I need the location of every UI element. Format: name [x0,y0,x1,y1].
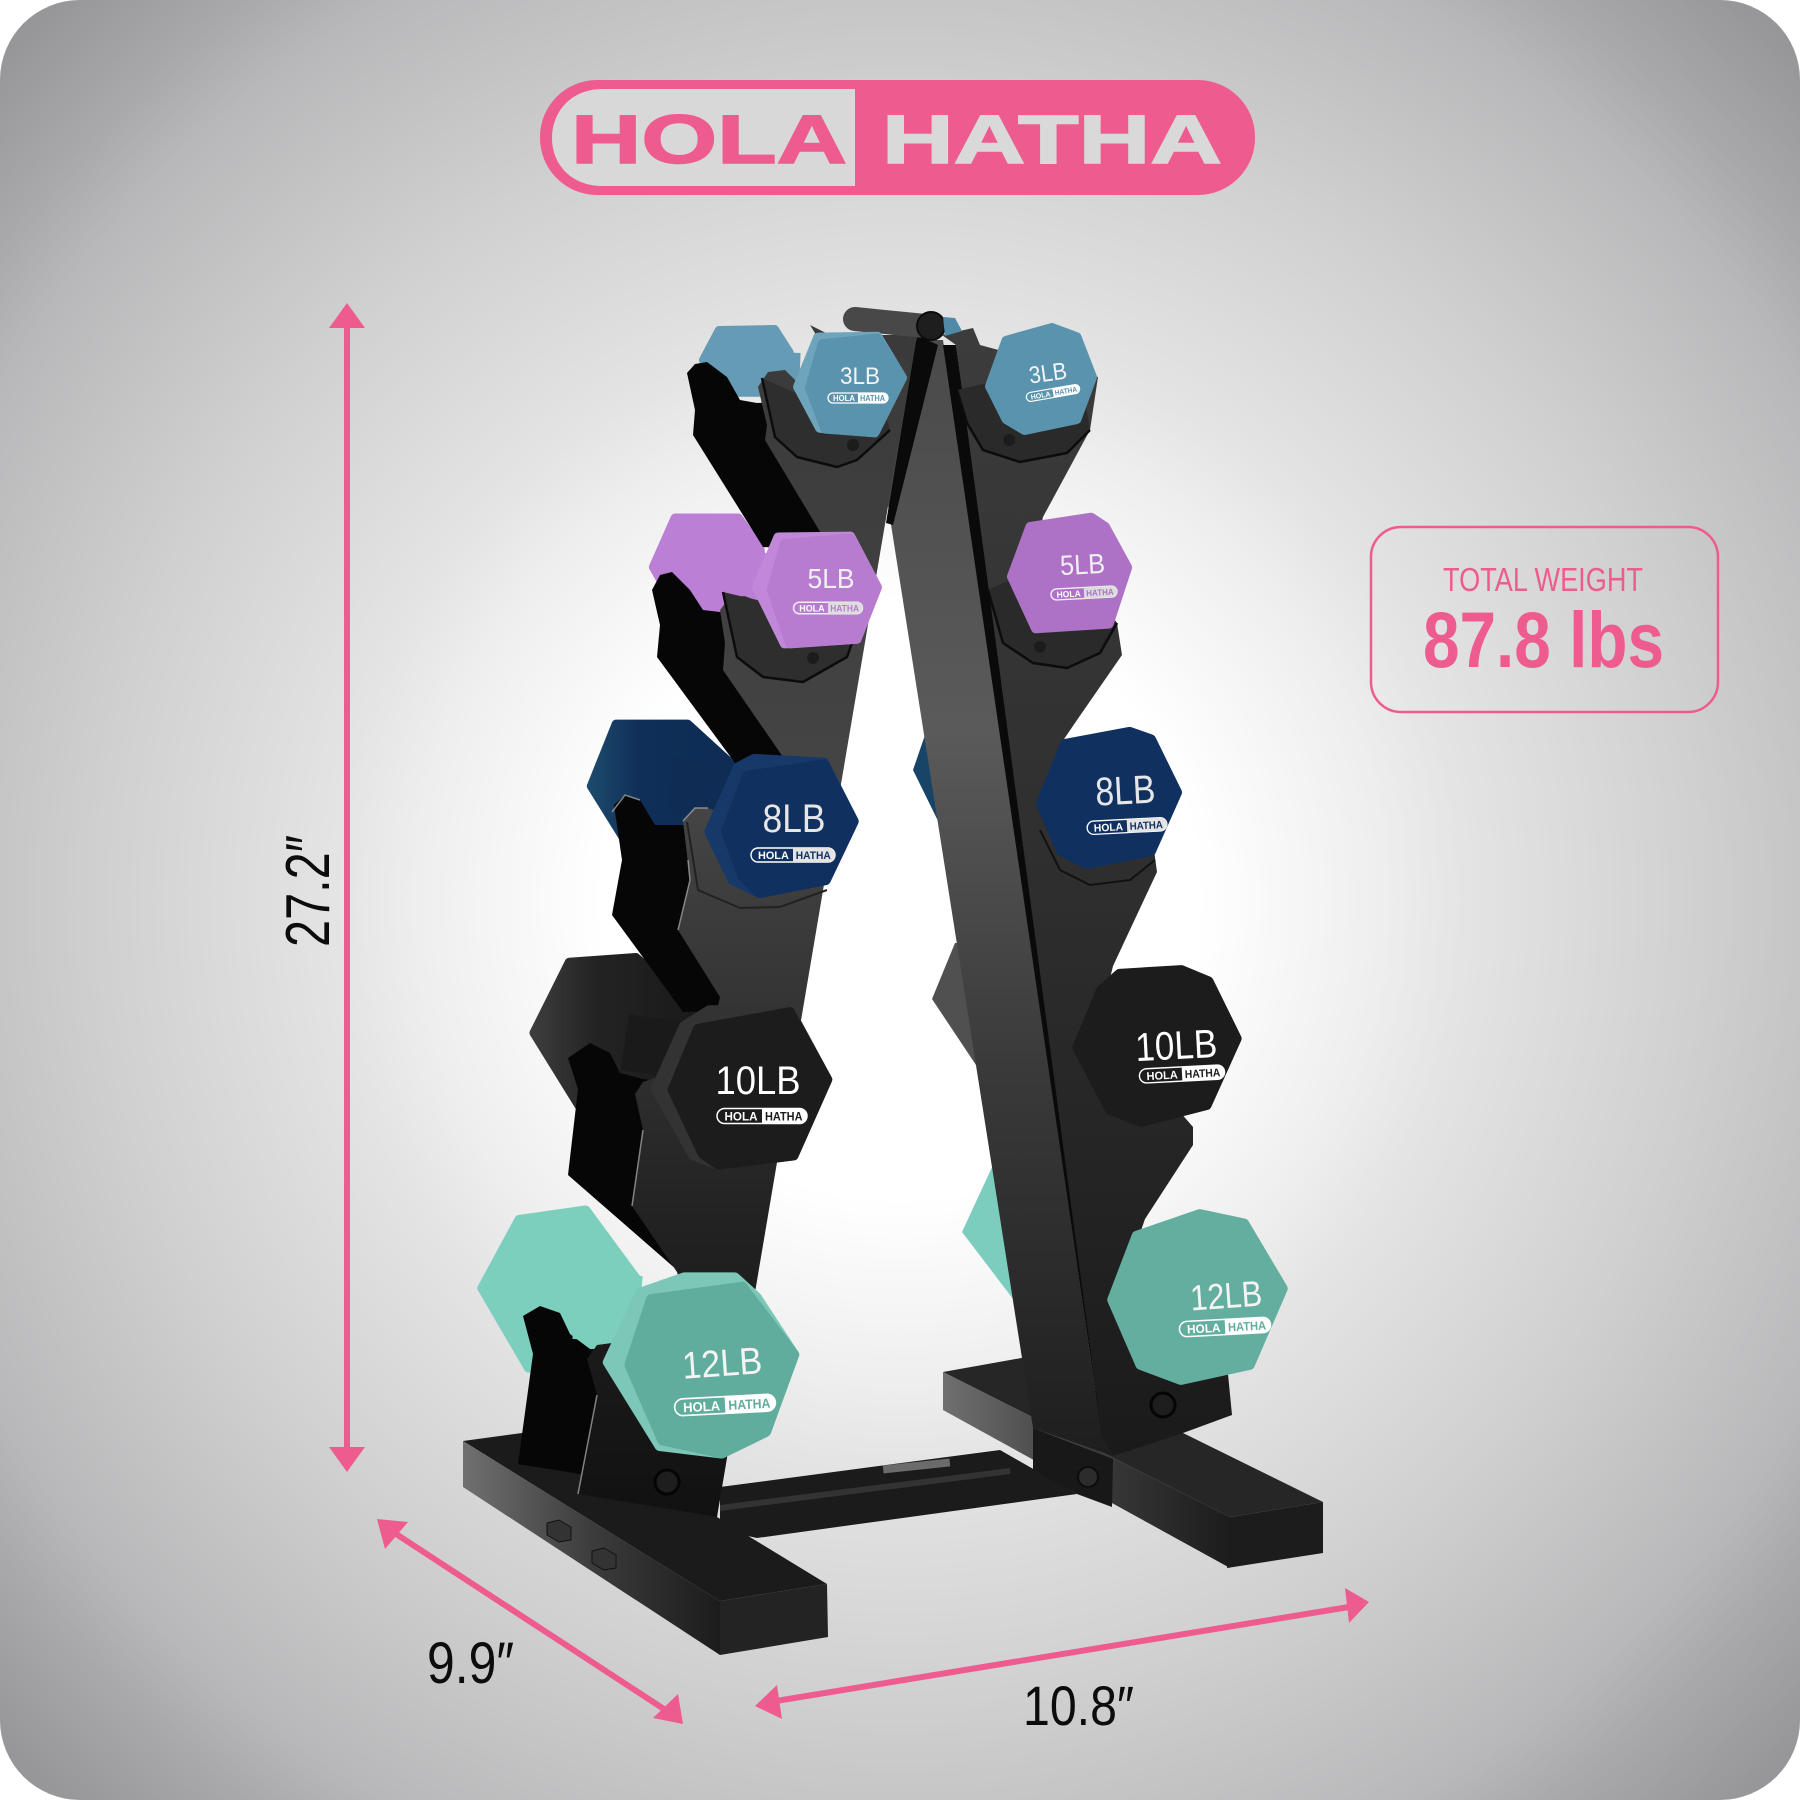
brand mark: HATHA [728,1396,771,1413]
rack base: rear foot and crossbar [463,1430,1077,1655]
dumbbell 8LB right: 8LB [1094,767,1156,815]
brand mark: HATHA [1054,385,1078,397]
brand mark: HOLA [1056,588,1082,600]
brand mark: HOLA [1187,1321,1221,1337]
dumbbell 12LB right [1112,1214,1283,1380]
brand mark [1087,817,1167,835]
brand mark: HOLA [833,394,855,403]
brand mark [674,1394,776,1416]
rear plate with hooks [518,362,850,1480]
brand mark: HOLA [758,850,789,862]
front plate, left side [578,325,917,1517]
brand mark: HOLA [683,1398,721,1415]
brand mark [828,393,888,403]
brand mark: HOLA [1030,389,1051,402]
rack top grip bar [855,312,962,340]
depth label: 9.9″ [427,1631,514,1696]
width dimension arrow [755,1588,1369,1719]
dumbbell 8LB left: 8LB [762,797,826,841]
hook rim highlights [578,795,708,1494]
rear head 10lb [534,958,696,1105]
width label: 10.8″ [1023,1674,1134,1737]
brand mark: HOLA [799,603,825,613]
brand mark [1179,1317,1271,1337]
brand mark: HOLA [724,1109,758,1124]
dumbbell 3LB right [990,328,1092,430]
brand mark: HATHA [796,850,831,862]
height dimension arrow [329,303,365,1472]
callout: total weight: 87.8 lbs [1423,595,1664,684]
brand mark: HATHA [860,394,885,403]
brand mark: HATHA [765,1109,803,1124]
central column [862,335,1113,1456]
dumbbell 10LB right [1078,970,1236,1122]
rear head 5lb [654,518,766,617]
brand mark [1051,586,1117,600]
dumbbell 5LB left [757,537,877,643]
dumbbell 5LB left: 5LB [808,563,854,594]
dumbbell handles, left stack [575,366,800,1310]
dumbbell 8LB right [1041,732,1177,864]
dumbbell 3LB right: 3LB [1027,358,1069,390]
logo: HolaHatha: HOLA [571,101,847,178]
dumbbell 12LB left [608,1278,794,1453]
dumbbell 5LB right [1012,518,1127,628]
brand mark: HATHA [1086,587,1115,598]
front plate, right side [942,328,1232,1456]
rear head 8lb [592,724,731,852]
brand mark [1139,1065,1225,1083]
callout: total weight [1371,527,1718,712]
dumbbell rear heads, left stack [482,330,789,1368]
rear head 3lb [704,330,789,392]
brand mark: HATHA [1185,1067,1221,1081]
rear heads visible behind column, right stack [913,735,1040,1308]
rear head 12lb [482,1210,636,1368]
dumbbell 5LB right: 5LB [1059,548,1106,581]
brand mark [794,602,862,614]
dumbbell 12LB left: 12LB [681,1340,764,1388]
depth dimension arrow [377,1519,683,1724]
dumbbell 10LB right: 10LB [1134,1022,1218,1070]
rubber hook cradles [687,378,1155,908]
brand mark: HOLA [1094,821,1124,835]
brand mark [717,1108,807,1124]
dumbbell 10LB left: 10LB [716,1059,800,1103]
dumbbell 3LB left [798,337,902,432]
dumbbell 10LB left [656,1010,827,1165]
brand mark [751,848,835,862]
brand mark: HATHA [1129,819,1164,833]
callout: total weight: TOTAL WEIGHT [1443,561,1643,598]
dumbbell 12LB right: 12LB [1189,1273,1263,1318]
logo: HolaHatha [540,80,1255,195]
brand mark: HATHA [830,603,859,613]
brand mark: HATHA [1228,1318,1267,1334]
logo: HolaHatha: HATHA [882,101,1222,178]
frame bolts and joint bracket [655,1393,1175,1507]
brand mark [1026,384,1080,402]
rack base: front foot [943,1357,1323,1568]
dumbbell 3LB left: 3LB [840,363,880,390]
brand mark: HOLA [1146,1069,1178,1083]
height label: 27.2″ [274,835,343,947]
dumbbell 8LB left [709,759,854,893]
